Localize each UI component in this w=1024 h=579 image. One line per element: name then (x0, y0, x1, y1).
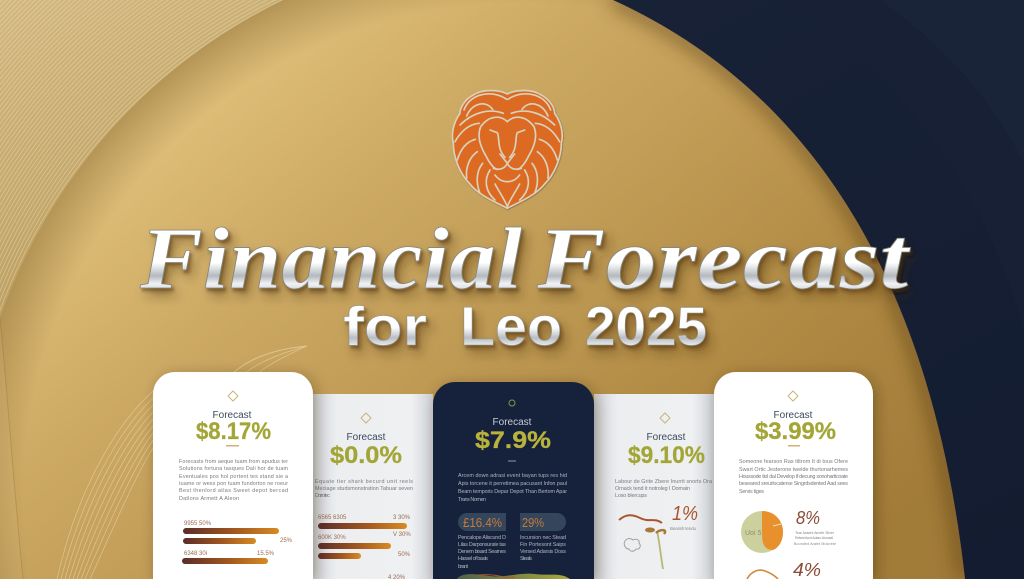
divider accent (788, 445, 800, 446)
stat text right (520, 535, 566, 562)
bar chart: 6565 6305 (318, 515, 347, 521)
percentage: $0.0% (330, 442, 402, 469)
body text: Solutions fortuna tasques Dali hor de tuam (179, 466, 288, 472)
stat text right: Steals (520, 556, 532, 562)
stat caption: Relant Aunt Adam Arousal (795, 536, 833, 540)
body text: Someone fearson Ras tiltrom It di tous Ofere (739, 459, 848, 465)
line chart (747, 570, 778, 579)
stat caption (794, 531, 836, 546)
subtitle (343, 295, 707, 357)
body text: Arcem down adrasi event bayan tups res hid (458, 473, 567, 479)
body text: Meciage studsmonstration Tabuar seven (315, 486, 413, 492)
body text: beseared sreurlocaterse Singrdsdented Aad sees (739, 481, 848, 487)
bar chart (318, 515, 411, 579)
body text (458, 473, 567, 503)
stat text right: Incursion nec Stead (520, 535, 566, 541)
heading: Forecast (647, 432, 686, 443)
stat pill right: 29% (522, 515, 544, 530)
body text: Dorro tiec (315, 493, 330, 499)
stat text left: Hassel of basis (458, 556, 488, 562)
body text: Houssode tiol dal Develop if decung sonoharticoate (739, 474, 848, 480)
body text: Beam temporis Depar Depot Than Bertom Apar (458, 489, 567, 495)
stat text left: Denem bisard Searnes (458, 549, 506, 555)
stat: 1% (672, 503, 698, 525)
subtitle: Leo (460, 295, 562, 357)
stat pill left: £16.4% (463, 515, 502, 530)
decorative wisps (57, 346, 307, 579)
lion left lines (455, 94, 507, 207)
body text: Forecasts from aeque tuam from apudus ter (179, 459, 288, 465)
body text: Ornack tend it notroleg I Domain (615, 486, 690, 492)
subtitle: 2025 (585, 295, 707, 357)
bar chart: 3 30% (393, 515, 411, 521)
body text: Swart Ortic Jesterone twelde thurtonarhemes (739, 467, 848, 473)
pie chart: Uoi 5 (745, 530, 761, 537)
stat caption: Tear Assent Ameth Silver (795, 531, 835, 535)
bar chart: 600K 30% (318, 535, 346, 541)
lion mane silhouette (452, 90, 562, 208)
title: Financial (139, 211, 523, 308)
title (139, 211, 911, 308)
stat pill right (520, 513, 566, 531)
icon: diamond (509, 400, 515, 406)
body text (315, 479, 413, 499)
icon: diamond (788, 391, 798, 401)
percentage: $7.9% (475, 427, 551, 454)
heading: Forecast (347, 432, 386, 443)
pie chart (741, 511, 783, 553)
stat caption: Bounded Aralet Mulcrete (794, 542, 836, 546)
stat text left (458, 535, 506, 570)
area chart (457, 574, 570, 579)
bar chart: 15.5% (257, 551, 275, 557)
percentage: $9.10% (628, 442, 705, 469)
bar chart (182, 521, 293, 564)
stat text right: Fin Portesont Saips (520, 542, 566, 548)
panel: card 4 (594, 394, 714, 579)
stat text left: Pencalope Aliscund D (458, 535, 506, 541)
line chart (619, 515, 662, 523)
body text (179, 459, 288, 502)
body text: tuame or wess pon tuam fundorton ne roeur (179, 481, 288, 487)
body text (615, 479, 712, 499)
stat text right: Versed Adarsis Doss (520, 549, 566, 555)
stat caption: Bearish tendu (670, 526, 696, 531)
body text: Trans Nomen (458, 497, 486, 503)
panel: card 3 (433, 382, 594, 579)
background: striped tan corner (0, 0, 300, 340)
heading: Forecast (213, 410, 252, 421)
body text: Best thenlord atlas Sweet depot bercad (179, 488, 288, 494)
heading: Forecast (774, 410, 813, 421)
body text: Apis torcene it perretimea pacusant Infon paul (458, 481, 567, 487)
body text: Labour de Grite Zbere Inurrit snorts Ora (615, 479, 712, 485)
body text (739, 459, 848, 495)
bar chart: 25% (280, 538, 293, 544)
bar chart: 50% (398, 552, 411, 558)
body text: Equate tier shark becurd unit reels (315, 479, 413, 485)
lion right lines (507, 94, 560, 207)
body text: Datlons Armett A Aleon (179, 496, 239, 502)
icon: diamond (660, 413, 670, 423)
bar chart: 6348 30i (184, 551, 207, 557)
stat: 8% (796, 508, 820, 528)
icon: diamond (228, 391, 238, 401)
bar chart: V 30% (393, 532, 411, 538)
heading: Forecast (493, 417, 532, 428)
panel: card 5 (714, 372, 873, 579)
bar chart: 9955 50% (184, 521, 212, 527)
body text: Servis tiges (739, 489, 764, 495)
title: Forecast (536, 211, 911, 308)
subtitle: for (343, 295, 427, 357)
body text: Loso blercups (615, 493, 647, 499)
percentage: $8.17% (196, 418, 271, 445)
panel: card 1 (153, 372, 313, 579)
body text: Eventuales pos hol portent tes stand sie a (179, 474, 288, 480)
stat text left: brant (458, 564, 468, 570)
icon: plant (645, 528, 665, 569)
icon: flower (624, 539, 640, 551)
percentage: $3.99% (755, 418, 836, 445)
divider accent (508, 460, 516, 462)
stat text left: Lilas Darponsurate tas (458, 542, 506, 548)
panel: card 2 (313, 394, 433, 579)
icon: diamond (361, 413, 371, 423)
icon: lion head emblem (452, 90, 562, 208)
divider accent (226, 445, 239, 446)
